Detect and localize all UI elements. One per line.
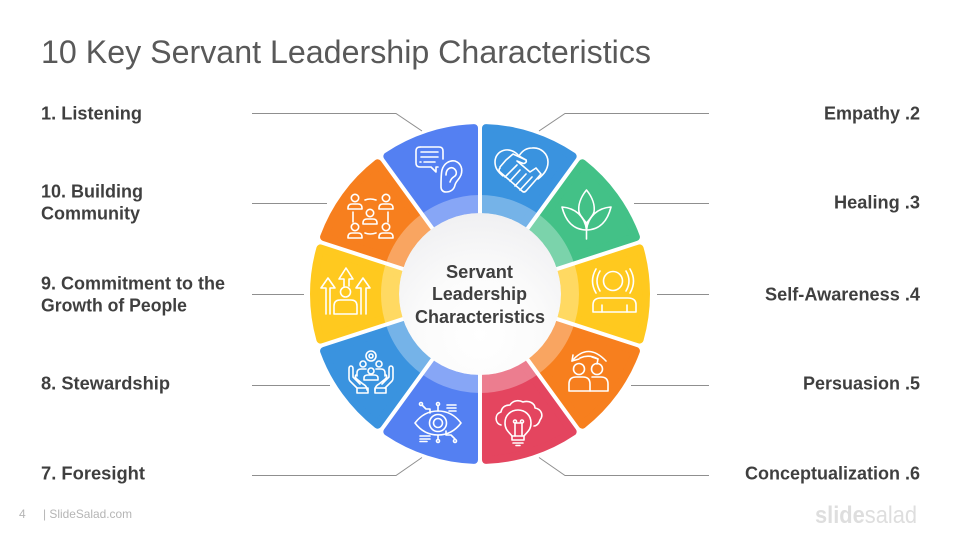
segment: Persuasion bbox=[501, 316, 636, 433]
center label: Servant bbox=[446, 262, 513, 282]
segment: Empathy bbox=[486, 128, 573, 242]
icon: stewardship hands with people bbox=[349, 351, 393, 393]
left label: 10. Building Community: 10. Building bbox=[41, 182, 143, 202]
right label: Self-Awareness .4: Self-Awareness .4 bbox=[765, 284, 920, 304]
segment: Listening bbox=[387, 105, 525, 249]
right label: Healing .3: Healing .3 bbox=[834, 192, 920, 212]
left label: 8. Stewardship: 8. Stewardship bbox=[41, 374, 170, 394]
segment: Foresight bbox=[387, 346, 474, 460]
left label: 1. Listening bbox=[41, 104, 422, 131]
icon: heart handshake bbox=[495, 148, 548, 192]
segment: Conceptualization bbox=[435, 339, 573, 483]
left label: 9. Commitment to the Growth of People bbox=[41, 274, 304, 316]
center label: Leadership bbox=[432, 284, 527, 304]
segment: Stewardship bbox=[308, 281, 445, 425]
right label: Empathy .2: Empathy .2 bbox=[824, 104, 920, 124]
icon: community network bbox=[348, 194, 393, 238]
left label: 10. Building Community: Community bbox=[41, 204, 140, 224]
icon: speech bubble and ear bbox=[416, 147, 462, 192]
segment: Self-Awareness bbox=[531, 248, 666, 366]
left label: 7. Foresight bbox=[41, 458, 422, 484]
center label: Characteristics bbox=[415, 307, 545, 327]
segmented wheel bbox=[294, 105, 666, 483]
icon: growth arrows with person bbox=[321, 268, 370, 314]
left label: 1. Listening: 1. Listening bbox=[41, 104, 142, 124]
left label: 7. Foresight: 7. Foresight bbox=[41, 464, 145, 484]
icon: eye with circuit lines bbox=[415, 402, 461, 442]
icon: light bulb with cloud bbox=[496, 401, 542, 446]
segment: Healing bbox=[515, 163, 652, 307]
left label: 9. Commitment to the Growth of People: 9. Commitment to the bbox=[41, 274, 225, 294]
icon: plant leaves bbox=[562, 190, 611, 239]
translucent inner ring bbox=[390, 204, 570, 384]
center circle bbox=[399, 213, 561, 375]
right label: Conceptualization .6 bbox=[539, 458, 920, 484]
right label: Empathy .2 bbox=[539, 104, 920, 131]
segment: Growth of People bbox=[294, 222, 429, 340]
right label: Persuasion .5: Persuasion .5 bbox=[803, 374, 920, 394]
right label: Conceptualization .6: Conceptualization .6 bbox=[745, 464, 920, 484]
left label: 10. Building Community bbox=[41, 182, 327, 224]
segment: Building Community bbox=[324, 155, 459, 272]
left label: 9. Commitment to the Growth of People: Growth of People bbox=[41, 296, 187, 316]
icon: persuasion two people bbox=[569, 352, 608, 391]
footer page number: 4 bbox=[19, 507, 26, 521]
title: 10 Key Servant Leadership Characteristics bbox=[41, 34, 651, 70]
center label bbox=[415, 262, 545, 327]
footer site name: | SlideSalad.com bbox=[43, 507, 132, 521]
icon: self-awareness head bbox=[592, 269, 636, 312]
footer logo: slidesalad bbox=[815, 502, 917, 529]
